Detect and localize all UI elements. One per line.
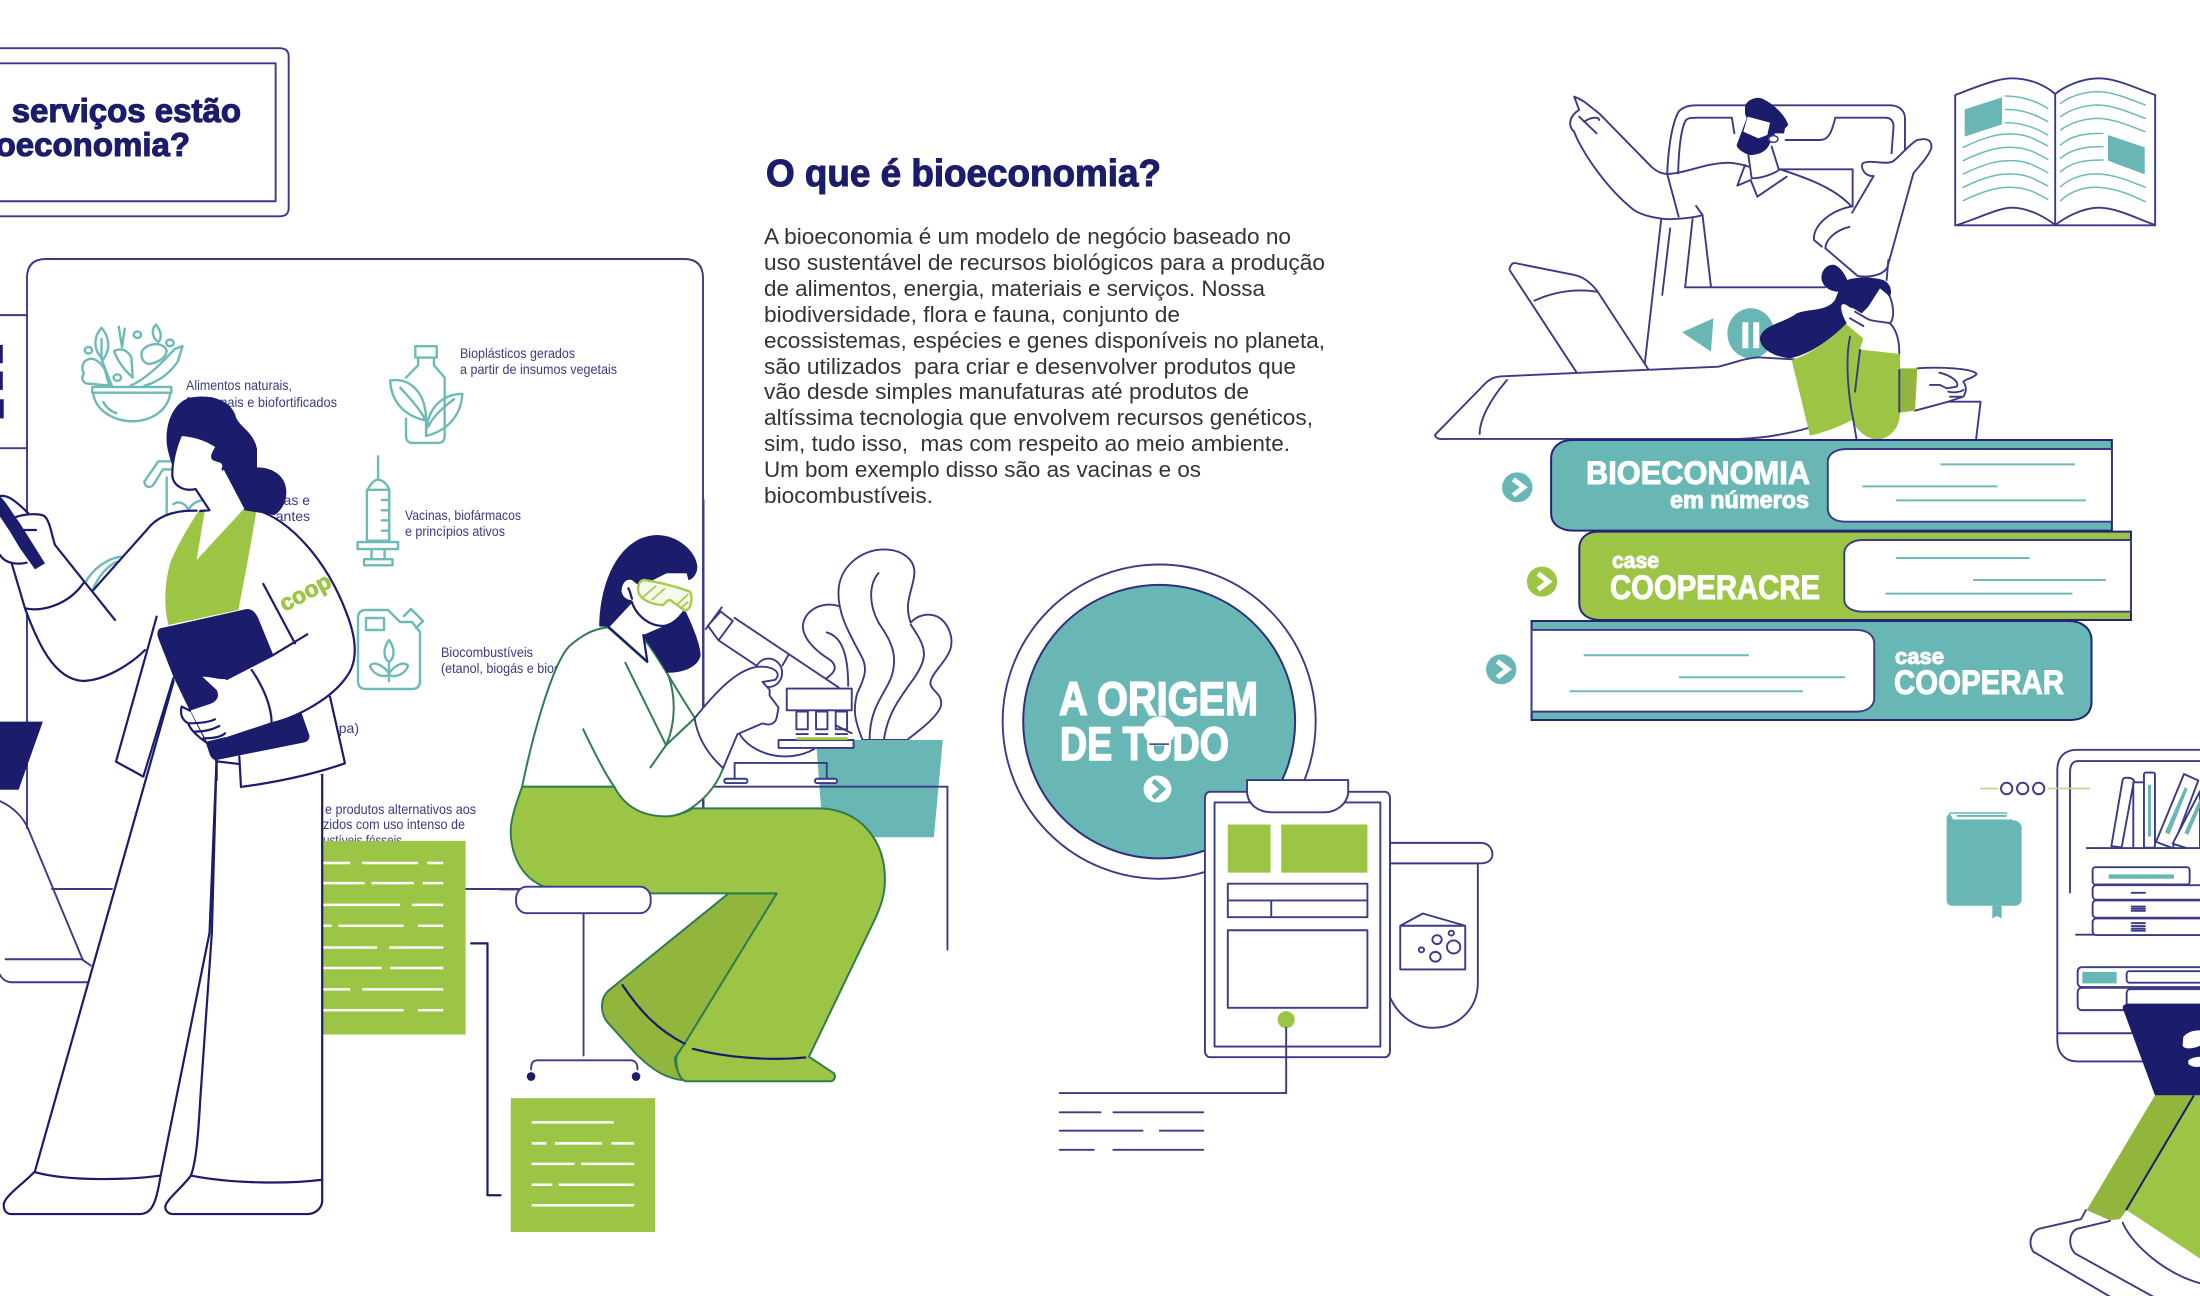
book: case Cooperacre: case — [1612, 548, 1659, 573]
player controls — [1682, 308, 1774, 358]
woman leg — [1435, 357, 1818, 439]
book: case Cooperar: case — [1895, 644, 1944, 669]
body text: altíssima tecnologia que envolvem recursos genéticos, — [764, 405, 1313, 430]
category labels: das e — [276, 492, 310, 508]
category labels: Biocombustíveis — [441, 644, 533, 660]
body text: são utilizados para criar e desenvolver produtos que — [764, 354, 1296, 379]
body text: biodiversidade, flora e fauna, conjunto de — [764, 302, 1180, 327]
illustration: man on chair with woman reclining — [1435, 97, 1981, 440]
category labels: zidos com uso intenso de — [323, 816, 465, 832]
torso — [522, 627, 723, 816]
stool — [500, 887, 651, 1081]
man raised arm — [1825, 139, 1931, 277]
heading: O que é bioeconomia? — [766, 153, 1161, 195]
book: case Cooperar: COOPERAR — [1894, 664, 2064, 702]
book: Bioeconomia em números — [1502, 440, 2112, 531]
category labels: apa) — [331, 720, 359, 736]
plant — [803, 549, 951, 740]
book stack menu — [1486, 440, 2131, 720]
icon: biofuel jerry can — [358, 609, 423, 689]
category labels: e princípios ativos — [405, 523, 505, 539]
scientist head with goggles — [599, 535, 701, 673]
panel: question title box — [0, 48, 289, 216]
coat, vest, tablet and arms — [0, 496, 355, 787]
green note lower — [511, 1098, 655, 1232]
category labels: ustíveis fósseis — [323, 832, 402, 848]
icon: syringe — [358, 456, 398, 565]
dots indicator — [1980, 783, 2090, 794]
coop logo on sleeve: coop — [275, 568, 335, 616]
form fields — [2078, 967, 2200, 1014]
body text: Um bom exemplo disso são as vacinas e os — [764, 457, 1201, 482]
pot — [816, 740, 943, 837]
category labels: e produtos alternativos aos — [325, 801, 476, 817]
illustration: beaker and clipboard — [1060, 780, 1492, 1150]
body text: ecossistemas, espécies e genes disponíveis no planeta, — [764, 328, 1325, 353]
category labels: antes — [276, 508, 310, 524]
clipboard — [1205, 780, 1390, 1057]
body text: uso sustentável de recursos biológicos para a produção — [764, 250, 1325, 275]
icon: open book — [1955, 78, 2155, 225]
button: A origem de tudo: A ORIGEM — [1059, 672, 1258, 725]
beaker with cheese — [1390, 843, 1492, 1028]
body text: A bioeconomia é um modelo de negócio baseado no — [764, 224, 1291, 249]
book: case Cooperar — [1486, 621, 2091, 720]
man head and collar — [1737, 98, 1853, 207]
body text: vão desde simples manufaturas até produtos de — [764, 379, 1249, 404]
book: Bioeconomia em números: BIOECONOMIA — [1586, 455, 1810, 491]
book: case Cooperacre: COOPERACRE — [1610, 569, 1820, 607]
category labels — [186, 345, 617, 848]
illustration: seated scientist with microscope — [500, 500, 951, 1081]
category labels: Bioplásticos gerados — [460, 345, 575, 361]
legs — [602, 893, 777, 1080]
body text: de alimentos, energia, materiais e serviços. Nossa — [764, 276, 1266, 301]
category labels: Vacinas, biofármacos — [405, 507, 521, 523]
desk — [704, 787, 947, 950]
panel: question title box: serviços estão — [12, 92, 241, 129]
head and hair — [167, 397, 286, 515]
icon: bioplastic bottle — [390, 346, 462, 443]
category labels: a partir de insumos vegetais — [460, 361, 617, 377]
microscope — [705, 607, 854, 783]
left edge fragment — [0, 722, 91, 982]
body text: sim, tudo isso, mas com respeito ao meio ambiente. — [764, 431, 1290, 456]
man body — [1570, 97, 1825, 363]
category labels: funcionais e biofortificados — [186, 394, 337, 410]
book: case Cooperacre — [1527, 532, 2131, 620]
bracket connector — [471, 943, 501, 1195]
chair frame — [1667, 105, 1905, 173]
book: Bioeconomia em números: em números — [1670, 487, 1809, 514]
leader lines — [1060, 1028, 1286, 1150]
category labels: (etanol, biogás e biodiesel) — [441, 660, 591, 676]
chair back — [1510, 263, 1649, 373]
green note with lines — [321, 841, 466, 1035]
icon: teal book with bookmark — [1947, 812, 2022, 918]
shelf books — [2076, 773, 2200, 935]
person with tablet — [2031, 1004, 2200, 1296]
illustration: standing woman — [0, 397, 355, 1214]
icon: drink cup — [144, 461, 205, 514]
board edge — [703, 500, 705, 808]
illustration: monitor with digital library — [1980, 750, 2200, 1296]
category labels: Alimentos naturais, — [186, 377, 292, 393]
icon: salad bowl — [82, 325, 183, 421]
reclining woman — [1760, 260, 1981, 440]
panel: product categories board — [0, 259, 703, 889]
body text — [764, 224, 1325, 508]
body text: biocombustíveis. — [764, 483, 933, 508]
button: A origem de tudo: DE TUDO — [1060, 717, 1229, 770]
button: A origem de tudo — [1003, 564, 1316, 879]
arm and hand — [695, 667, 779, 768]
trousers and shoes — [4, 678, 322, 1214]
